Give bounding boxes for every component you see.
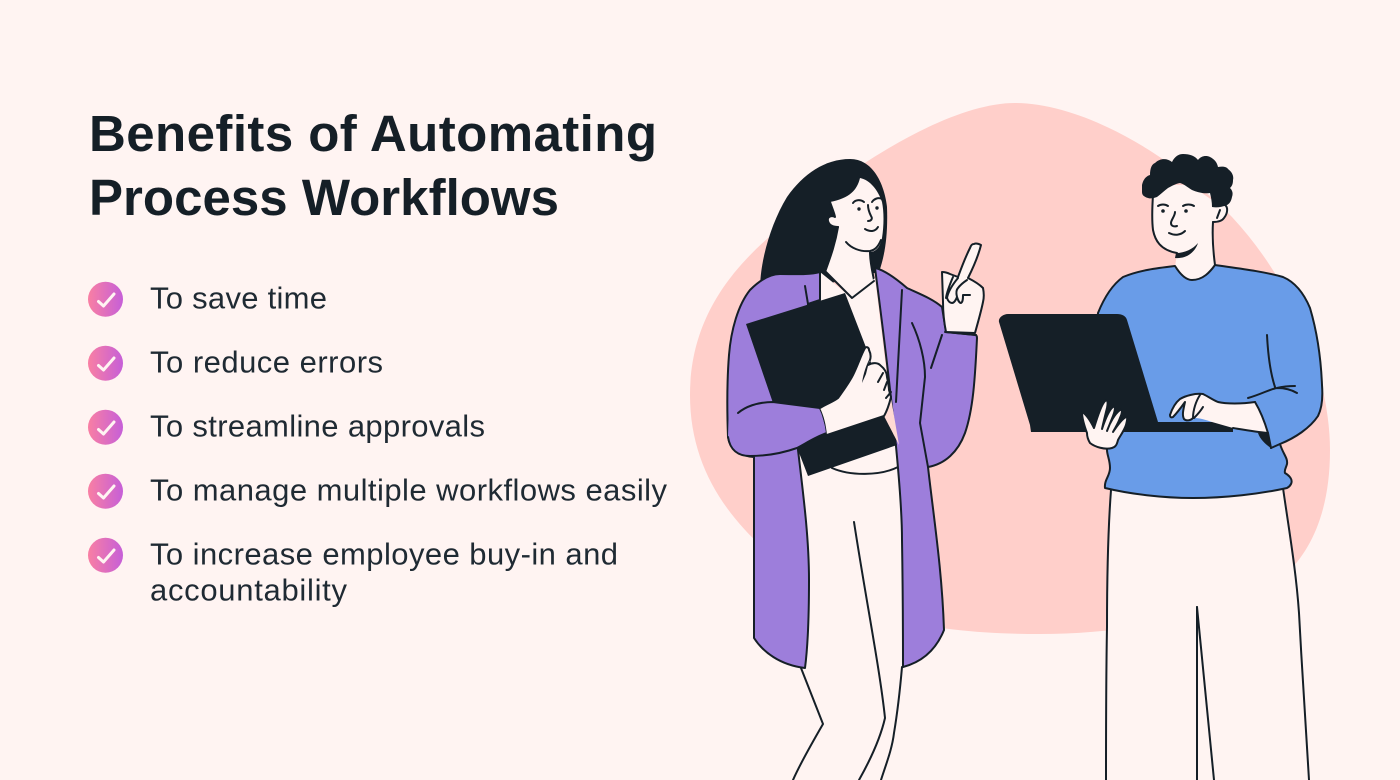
- heading: [89, 105, 657, 226]
- list item: employee buy-in: accountability: [150, 572, 348, 608]
- shirt sliver beside hand: [884, 398, 899, 445]
- list item: employee buy-in: [88, 536, 618, 608]
- man right hand on keyboard: [1170, 394, 1271, 448]
- list item: manage workflows: To manage multiple workflows easily: [150, 472, 668, 508]
- woman neck and face: [825, 178, 884, 298]
- left sleeve over folder: [728, 400, 827, 456]
- woman trousers: [790, 500, 903, 780]
- woman facial features: [853, 198, 882, 231]
- hem curve: [832, 467, 898, 474]
- list item: reduce errors: To reduce errors: [150, 344, 383, 380]
- woman hand holding folder: [820, 347, 891, 435]
- woman illustration: [727, 159, 984, 780]
- sleeve fold lines: [1248, 335, 1297, 448]
- man hair: [1142, 154, 1233, 207]
- list item: streamline approvals: To streamline approvals: [150, 408, 485, 444]
- man left hand under laptop: [1082, 400, 1127, 449]
- folder: [746, 293, 897, 476]
- jacket right panel and raised sleeve: [875, 268, 977, 667]
- laptop: [999, 314, 1233, 432]
- woman top: [800, 272, 902, 500]
- list item: employee buy-in: To increase employee buy-in and: [150, 536, 618, 572]
- woman raised hand: [942, 244, 984, 335]
- man facial features: [1158, 204, 1194, 235]
- heading: Benefits of Automating: [89, 105, 657, 162]
- heading: Process Workflows: [89, 169, 559, 226]
- background blob: [690, 103, 1330, 634]
- man sweater: [1090, 265, 1322, 498]
- man trousers: [1106, 488, 1309, 780]
- jacket left panel: [727, 272, 820, 668]
- benefits list: [88, 280, 668, 608]
- jacket fold lines: [805, 286, 942, 467]
- man illustration: [999, 154, 1322, 780]
- woman hair: [760, 159, 887, 290]
- list item: save time: To save time: [150, 280, 327, 316]
- man neck and head: [1152, 185, 1227, 280]
